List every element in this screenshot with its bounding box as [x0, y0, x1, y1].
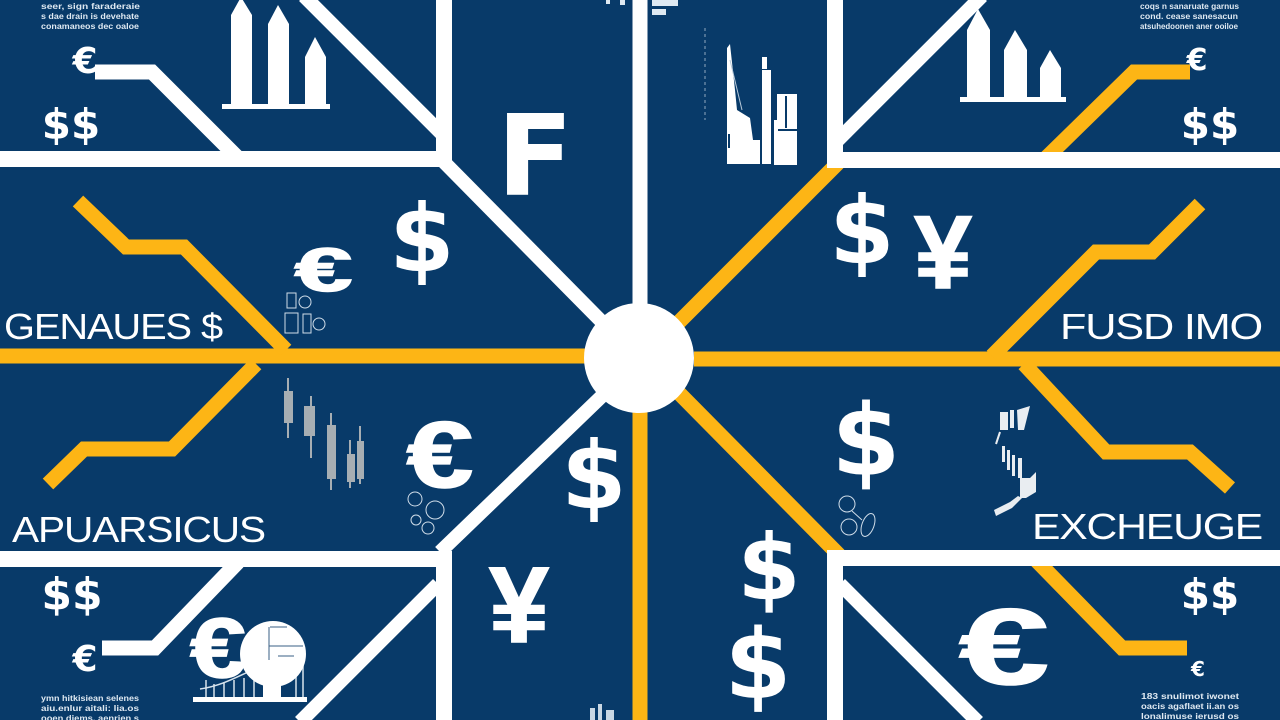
small text top right: atsuhedoonen aner ooiloe	[1140, 21, 1238, 31]
small text top left: conamaneos dec oaloe	[41, 21, 139, 31]
heading letter F: F	[497, 92, 573, 222]
globe details	[269, 627, 303, 660]
scribble icon upper left	[285, 293, 325, 333]
small text bottom right	[1141, 691, 1239, 720]
small icon bottom centre	[590, 704, 614, 720]
euro sign lower left: €	[407, 402, 473, 507]
yen sign upper right: ¥	[914, 195, 972, 311]
double dollar bottom left: $$	[41, 569, 103, 620]
dollar sign bottom two: $	[725, 609, 791, 720]
small text bottom right: 183 snulimot iwonet	[1141, 691, 1239, 701]
small euro top left: €	[71, 41, 98, 82]
double dollar top right: $$	[1181, 100, 1239, 149]
small symbol top right: €	[1186, 43, 1207, 78]
small text bottom right: oacis agaflaet ii.an os	[1141, 701, 1239, 711]
scribble icon circles lower left	[408, 492, 444, 534]
chart trend line	[200, 672, 248, 689]
spiral bar chart	[994, 406, 1036, 516]
label left lower: APUARSICUS	[12, 509, 265, 550]
bar chart arrows top left	[222, 0, 330, 109]
city skyline chart	[705, 28, 797, 165]
globe circle	[240, 621, 306, 687]
small text top right	[1140, 1, 1239, 31]
small icons near top centre	[606, 0, 678, 15]
globe stand	[263, 684, 281, 698]
small text top left: s dae drain is devehate	[41, 11, 139, 21]
double dollar bottom right: $$	[1181, 570, 1239, 619]
dollar sign bottom one: $	[737, 516, 801, 621]
euro sign upper left: €	[295, 237, 352, 305]
dollar sign lower centre: $	[561, 422, 627, 531]
small text top right: coqs n sanaruate garnus	[1140, 1, 1239, 11]
chart baseline	[193, 697, 307, 702]
euro sign lower right: €	[959, 587, 1049, 708]
small text bottom left: ymn hitkisiean selenes	[41, 693, 139, 703]
dollar sign upper left: $	[389, 185, 455, 294]
candlestick chart	[284, 378, 364, 490]
central hub circle	[584, 303, 694, 413]
small text top left: seer, sign faraderaie	[41, 1, 140, 11]
dollar sign upper right: $	[829, 177, 895, 286]
scribble icon circles lower right	[839, 496, 878, 538]
small text top left	[41, 1, 140, 31]
small text bottom left	[41, 693, 139, 720]
bar chart arrows top right	[960, 9, 1066, 102]
euro sign on chart: €	[190, 601, 246, 695]
euro and globe bar chart	[190, 601, 307, 702]
small text top right: cond. cease sanesacun	[1140, 11, 1238, 21]
label left upper: GENAUES $	[4, 306, 223, 347]
small text bottom left: aiu.enlur aitali: lia.os	[41, 703, 139, 713]
small symbol bottom right: €	[1190, 657, 1205, 681]
label right lower: EXCHEUGE	[1032, 506, 1262, 547]
chart vertical ticks	[206, 660, 303, 697]
yen sign lower centre: ¥	[489, 544, 549, 665]
dollar sign lower right: $	[832, 384, 900, 499]
double dollar top left: $$	[42, 100, 100, 149]
label right upper: FUSD IMO	[1060, 306, 1262, 347]
small euro bottom left: €	[71, 639, 98, 680]
